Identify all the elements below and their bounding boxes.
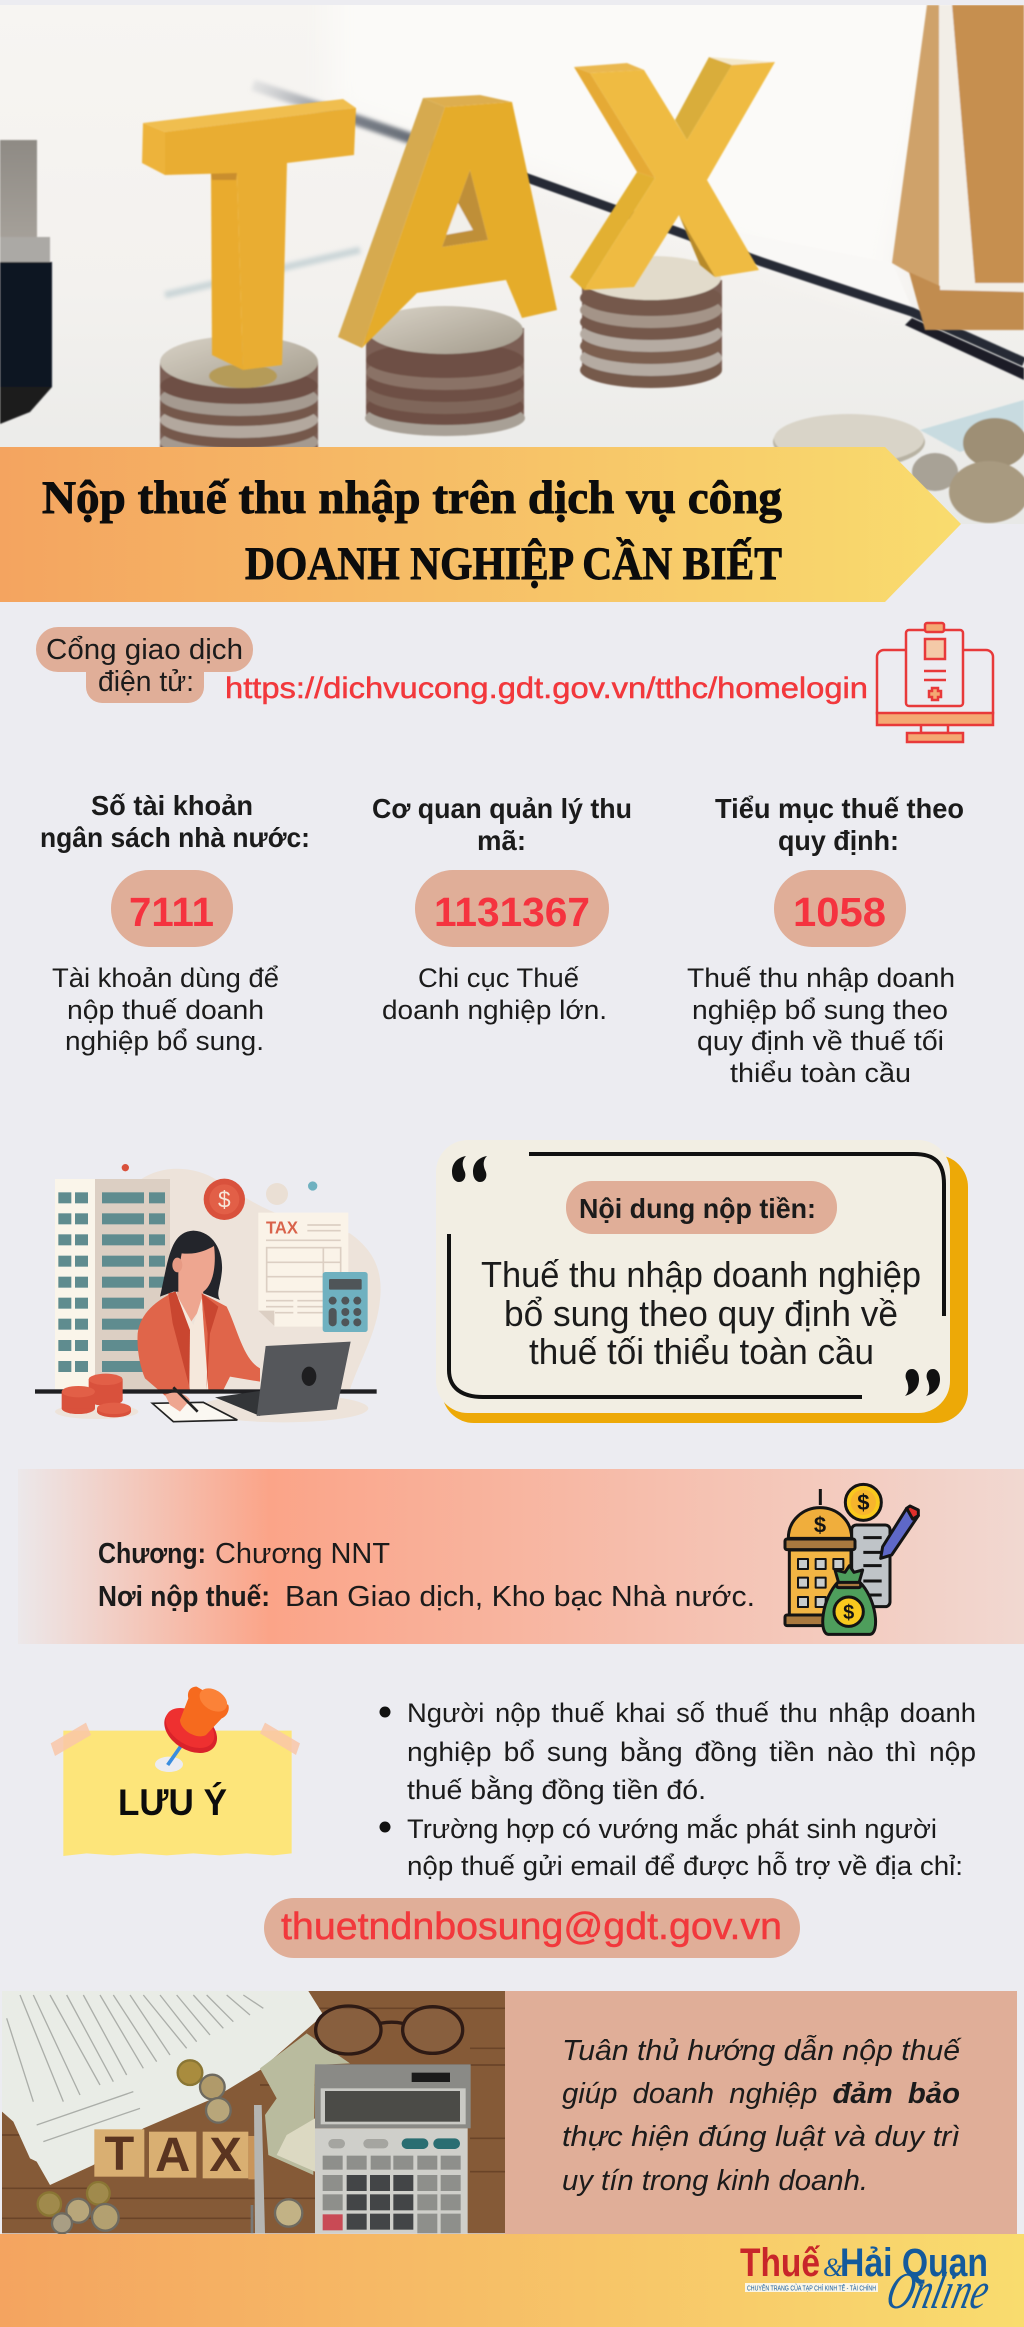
coin stack three — [580, 256, 722, 388]
column: managing authority: doanh nghiệp lớn. — [382, 995, 607, 1025]
quote text: Thuế thu nhập doanh nghiệp — [481, 1254, 921, 1295]
portal label pill: điện tử: — [98, 666, 194, 698]
logo: Thuế & Hải Quan Online: Thuế — [740, 2241, 821, 2285]
icon: monitor with clipboard — [877, 623, 993, 742]
coin stack one — [159, 337, 319, 447]
label pill — [566, 1181, 837, 1234]
sticky note: Lưu ý: LƯU Ý — [118, 1782, 227, 1823]
bullet one: nghiệp bổ sung bằng đồng tiền nào thì nộp — [407, 1736, 976, 1767]
panel: chapter and payment place band — [18, 1469, 1024, 1644]
panel: payment content quote box — [436, 1140, 968, 1423]
panel: compliance closing message: thực hiện đúng luật và duy trì — [562, 2121, 960, 2153]
footer band — [0, 2234, 1024, 2327]
description: Thuế thu nhập doanh — [687, 963, 955, 993]
dark object at left — [0, 140, 52, 424]
panel: compliance closing message: Tuân thủ hướng dẫn nộp thuế — [562, 2034, 962, 2067]
note bullet list — [380, 1698, 976, 1881]
panel: payment content quote box: thuế tối thiểu toàn cầu — [529, 1331, 874, 1372]
column: managing authority — [372, 793, 632, 1025]
folder at right — [892, 5, 1024, 330]
portal label pill: Cổng giao dịch — [46, 634, 243, 666]
sticky note: Lưu ý — [51, 1684, 300, 1856]
hero photo: TAX letters on coin stacks — [0, 0, 1024, 524]
description: Tài khoản dùng để — [52, 963, 279, 993]
icon: opening quote — [452, 1156, 487, 1182]
column: account number — [40, 790, 310, 1056]
heading: Cơ quan quản lý thu — [372, 793, 632, 824]
logo: Thuế & Hải Quan Online: CHUYÊN TRANG CỦA TẠP CHÍ KINH TẾ - TÀI CHÍNH — [747, 2282, 876, 2292]
column: tax sub-item: nghiệp bổ sung theo — [692, 995, 948, 1025]
logo: Thuế & Hải Quan Online: & — [823, 2253, 844, 2282]
logo: Thuế & Hải Quan Online: Hải Quan — [840, 2241, 988, 2285]
icon: bank, money bag and document: $ — [843, 1602, 854, 1624]
letter T — [142, 99, 356, 370]
letter X — [570, 57, 775, 290]
illustration: businesswoman at laptop — [35, 1164, 381, 1422]
bullet one — [380, 1698, 976, 1805]
column: tax sub-item: thiểu toàn cầu — [730, 1058, 911, 1088]
panel: compliance closing message: giúp doanh nghiệp đảm bảo — [562, 2078, 960, 2110]
panel: compliance closing message: uy tín trong kinh doanh. — [562, 2165, 868, 2197]
title line 1: Nộp thuế thu nhập trên dịch vụ công — [42, 472, 782, 524]
panel: chapter and payment place band: Ban Giao dịch, Kho bạc Nhà nước. — [285, 1581, 755, 1613]
email pill: thuetndnbosung@gdt.gov.vn — [281, 1906, 782, 1948]
panel: chapter and payment place band: Chương NNT — [215, 1538, 390, 1570]
bullet one: Người nộp thuế khai số thuế thu nhập doanh — [407, 1698, 976, 1728]
number pill — [774, 870, 906, 947]
number pill — [111, 870, 233, 947]
portal label pill — [36, 627, 253, 703]
email pill — [264, 1898, 800, 1958]
photo: tax blocks, calculator, glasses, coins: A — [155, 2128, 190, 2182]
title line 2: DOANH NGHIỆP CẦN BIẾT — [245, 537, 782, 590]
icon: bank, money bag and document: $ — [814, 1512, 826, 1537]
illustration: businesswoman at laptop: $ — [218, 1186, 231, 1212]
panel: payment content quote box: Nội dung nộp tiền: — [579, 1193, 816, 1224]
icon: bank, money bag and document — [785, 1484, 918, 1634]
column: tax sub-item: quy định về thuế tối — [697, 1026, 944, 1056]
payment place line: Nơi nộp thuế: — [98, 1581, 270, 1613]
illustration: businesswoman at laptop: TAX — [266, 1218, 298, 1238]
column: tax sub-item — [687, 793, 964, 1088]
panel: payment content quote box: bổ sung theo quy định về — [504, 1293, 898, 1334]
photo: tax blocks, calculator, glasses, coins: T — [104, 2127, 134, 2181]
panel: compliance closing message — [505, 1991, 1017, 2234]
icon: closing quote — [905, 1369, 940, 1396]
photo: tax blocks, calculator, glasses, coins — [2, 1991, 505, 2233]
title banner — [0, 447, 961, 602]
portal url: https://dichvucong.gdt.gov.vn/tthc/homelogin — [225, 672, 868, 705]
loose coins — [773, 400, 1024, 523]
column: account number: 7111 — [129, 889, 214, 935]
column: managing authority: 1131367 — [434, 889, 590, 935]
icon: bank, money bag and document: $ — [857, 1490, 869, 1515]
column: account number: nộp thuế doanh — [67, 995, 264, 1025]
photo: tax blocks, calculator, glasses, coins: X — [209, 2128, 242, 2182]
heading: Tiểu mục thuế theo — [715, 793, 964, 824]
bullet two: nộp thuế gửi email để được hỗ trợ về địa chỉ: — [407, 1850, 963, 1881]
column: tax sub-item: 1058 — [793, 889, 886, 935]
bullet one: thuế bằng đồng tiền đó. — [407, 1774, 706, 1805]
column: account number: ngân sách nhà nước: — [40, 822, 310, 853]
column: account number: nghiệp bổ sung. — [65, 1026, 264, 1056]
number pill — [415, 870, 609, 947]
logo: Thuế & Hải Quan Online — [740, 2241, 995, 2320]
column: managing authority: mã: — [477, 825, 526, 856]
coin stack two — [365, 306, 525, 436]
letter A — [338, 95, 557, 348]
chapter line: Chương: — [98, 1538, 206, 1570]
column: tax sub-item: quy định: — [778, 825, 899, 856]
bullet two: Trường hợp có vướng mắc phát sinh người — [407, 1813, 937, 1844]
description: Chi cục Thuế — [418, 963, 579, 993]
heading: Số tài khoản — [91, 790, 253, 821]
bullet two — [380, 1813, 963, 1881]
